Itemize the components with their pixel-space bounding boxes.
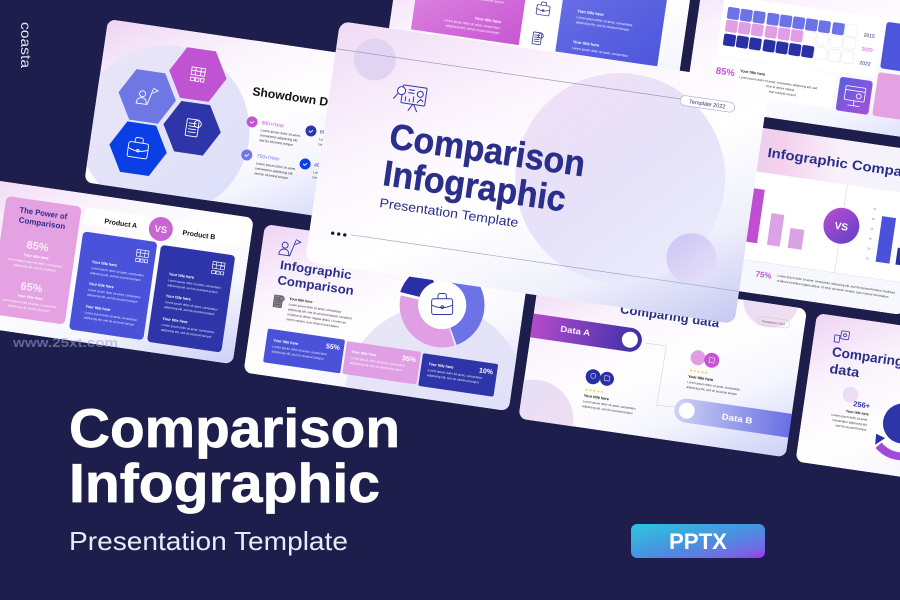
stat: 600+/Year: 600+/Year [319,129,343,139]
rating block: right: ★★★★★ [689,368,709,375]
top rule [336,49,680,99]
panel: Product B list: Your title here [162,317,188,324]
panel: blue: Lorem ipsum dolor sit amet, consectetur [572,46,629,58]
slide: Showdown Data [85,20,336,216]
stat: 900+/Year [246,116,300,146]
header: Product A versus Product B: Product B [182,230,216,241]
panel: squares card: 2022 [859,60,871,68]
panel: pink stats: 65% [20,280,43,296]
card: 55%: Your title here [273,338,299,346]
card: 35% [342,341,421,385]
panel: Product B list: adipiscing elit, sed do eiusmod tempor [164,305,215,316]
card: 10% [418,353,498,397]
panel: blue: Your title here [573,39,600,48]
stat: 256+: Lorem ipsum dolor sit amet, [831,413,869,422]
decorative circle [345,312,516,410]
heading [829,344,900,386]
heading: data [829,361,861,380]
panel: Product B list: adipiscing elit, sed do eiusmod tempor [167,283,218,294]
slide: The Power of Comparison [0,176,254,364]
panel: 85% card: aliquam erat volutpat nostrud [757,88,797,97]
header: Product A versus Product B [84,208,215,240]
hexagon: magenta [169,47,227,102]
panel: Product B list: Your title here [165,294,191,302]
slide: Comparing data right [795,313,900,500]
panel: Product B list: Lorem ipsum dolor sit amet, consectetur [165,300,218,312]
rating block: left: ★★★★★ [584,387,604,394]
divider [835,185,847,273]
panel: Product A list: Your title here [88,282,114,289]
pill: Data B [673,397,810,440]
tag: Template 2022 [679,95,735,113]
cycle graphic [873,400,900,459]
panel: white centre with icons [518,0,550,46]
header: Product A versus Product B: Product A [104,218,137,230]
text block: Lorem ipsum dolor sit amet, consectetur [288,302,342,314]
card: 55%: adipiscing elit, sed do eiusmod tempor [271,349,324,361]
panel: pink stats: Your title here [17,294,43,301]
rating block: left: adipiscing elit, sed do eiusmod tempor [582,404,633,415]
card: 10%: 10% [479,367,494,377]
panel: pink: adipiscing elit, sed do eiusmod tempor [445,23,501,35]
badge: PPTX: PPTX [669,529,727,554]
stat: 600+/Year: consectetur adipiscing elit, [318,142,357,152]
panel: pink stats: Lorem ipsum dolor sit amet, consectetur [8,257,63,269]
panel: 85% card: Lorem ipsum dolor sit amet, consectetur adipiscing elit, sed [739,75,818,90]
bar chart: left [742,188,809,250]
stat: 900+/Year: 900+/Year [261,120,285,130]
panel: Product A list [69,231,157,340]
title: Infographic [381,152,569,219]
panel: pink stats: 85% [26,239,49,254]
heading: Comparing data [619,302,721,331]
stat: 400+/Year: 400+/Year [314,162,337,172]
slide: Comparing data A and B [519,295,806,456]
panel: 85% card: tincidunt ut labore et dolore magna [748,81,795,92]
stat: 750+/Year [241,150,296,180]
pagination dots [331,231,347,237]
card: 35%: 35% [401,355,417,364]
panel: pink stats: Comparison [18,215,66,231]
stat: 256+: 256+ [853,399,871,411]
panel: Product B list [147,245,235,353]
card: 10%: adipiscing elit, sed do eiusmod tempor [427,373,479,385]
headline: Infographic [69,452,380,514]
panel: 85% card: Your title here [740,69,765,77]
card: 55% [263,329,345,373]
stat: 750+/Year: 750+/Year [256,153,280,163]
panel: Product B list: Your title here [169,272,194,280]
panel: 85% card: 85% [715,66,736,79]
stat: 400+/Year: Lorem ipsum dolor sit amet, [313,170,354,180]
card: 55%: Lorem ipsum dolor sit amet, consectetur [272,344,327,356]
pill: Data B: Data B [721,411,753,426]
header band [634,110,900,197]
bar chart: right: 50 [870,227,874,231]
rating block: right: adipiscing elit, sed do eiusmod tempor [686,385,737,396]
badge: PPTX [631,524,765,558]
text block: adipiscing elit, sed do eiusmod tempor incididunt [288,307,352,321]
slide: Infographic Comparison with donut [244,225,526,410]
stat: 400+/Year [300,158,320,179]
bar chart: right: 30 [867,246,871,251]
panel: pink: Your title here [474,15,502,24]
card: 10%: Lorem ipsum dolor sit amet, consectetur [427,368,482,380]
decorative blob: bottom left [519,380,574,426]
main slide: Comparison Infographic [305,21,769,324]
stat: 600+/Year [305,126,324,146]
panel: blue [555,0,670,66]
stat: 256+: Your title here [846,409,869,417]
stat: 600+/Year: Lorem ipsum dolor sit amet, [319,137,359,147]
text block: ut labore et dolore magna aliqua. Ut enim ad [287,312,346,325]
slide: Infographic Comparison bar charts [616,110,900,317]
panel: Product A list: Lorem ipsum dolor sit amet, consectetur [88,288,141,299]
footer strip: ut labore et dolore magna aliqua. Ut enim ad minim veniam, quis nostrud exercitation [777,279,889,299]
badge: VS [148,217,173,241]
bar chart: right [866,207,900,267]
panel: pink stats [0,196,82,325]
badge: VS [821,205,862,246]
text block: Your title here [289,297,313,304]
heading: Infographic [279,258,353,282]
donut chart [400,276,484,348]
stat: 750+/Year: sed do eiusmod tempor [254,171,290,180]
rating block: right: Your title here [688,375,713,382]
decorative big circle [501,59,739,297]
decorative circle [86,46,250,201]
stat: 256+: sed do eiusmod tempor [835,423,867,432]
panel: Product A list: Lorem ipsum dolor sit amet, consectetur [91,266,144,278]
panel: 85% card [716,67,818,96]
badge: VS: VS [154,224,168,236]
panel: Product B list: adipiscing elit, sed do eiusmod tempor [161,328,212,339]
panel: pink [411,0,531,45]
decorative circle: top left [351,36,399,83]
panel: pink stats: adipiscing elit, sed do eiusmod [7,303,50,313]
panel: Product A list: adipiscing elit, sed do eiusmod tempor [84,315,135,327]
footer strip: Lorem ipsum dolor sit amet, consectetur adipiscing elit, sed do eiusmod tempor incididunt [777,274,895,295]
icon: flag person [279,237,301,257]
title [381,115,588,221]
icon tile: monitor [836,77,873,115]
panel: Product B list: Lorem ipsum dolor sit amet, consectetur [168,278,221,290]
panel: pink stats: The Power of [19,206,68,221]
decorative blob [841,386,860,404]
heading: Showdown Data [252,84,347,112]
hexagon: blue [109,121,167,176]
card: 35%: Your title here [351,350,377,357]
stat: 750+/Year: consectetur adipiscing elit, [255,166,294,176]
panel: Product A list: Your title here [85,304,111,312]
bar chart: right: 20 [866,256,870,261]
slide: yearly grid (top right) [685,0,900,149]
hexagon: periwinkle [118,69,176,124]
heading [278,260,353,295]
stat: 900+/Year: Lorem ipsum dolor sit amet, [260,128,301,138]
panel: Product A list: Your title here [92,260,117,268]
footer strip: 75% [755,269,772,281]
heading: Comparison [277,273,355,298]
subheading: Presentation Template [69,526,348,556]
panel: Product A list: adipiscing elit, sed do eiusmod tempor [90,271,141,282]
footer strip [616,242,900,315]
card: 35%: Lorem ipsum dolor sit amet, consectetur [350,356,405,368]
rating block: right [686,349,745,397]
rating block: left: Your title here [584,394,609,401]
slide: pink and blue panels (top centre) [389,0,690,71]
panel: pink: Lorem ipsum dolor sit amet, consectetur [444,18,501,30]
icon: documents [834,330,850,344]
badge: VS: VS [834,221,849,234]
bar chart: right: 40 [869,236,873,241]
pill: Data A: Data A [560,324,591,338]
panel: pink stats: adipiscing elit, sed do eiusmod [13,263,56,273]
panel: blue: Lorem ipsum dolor sit amet, consectetur [576,15,634,27]
panel: squares card: 2015 [863,33,875,40]
watermark: www.25xt.com [12,335,118,350]
panel: blue tile [880,22,900,72]
card: 35%: adipiscing elit, sed do eiusmod tempor [350,361,402,372]
stat: 900+/Year: consectetur adipiscing elit, [260,133,298,143]
title: Comparison [387,115,588,184]
stat: 256+: consectetur adipiscing elit, [832,418,868,427]
pill: Data A [516,312,643,353]
panel: blue: adipiscing elit, sed do eiusmod tempor [575,20,631,32]
tag: Template 2022: Template 2022 [689,99,726,111]
panel: Product A list: Lorem ipsum dolor sit amet, consectetur [84,310,138,322]
card: 10%: Your title here [428,362,454,370]
stat: 750+/Year: Lorem ipsum dolor sit amet, [255,161,296,171]
stat: 400+/Year: consectetur adipiscing elit, [312,175,351,185]
bar chart: right: 60 [871,217,875,221]
panel: squares card: 2020 [861,46,873,54]
panel: Product A list: adipiscing elit, sed do eiusmod tempor [87,293,138,304]
bar chart: right: 70 [873,207,877,211]
decorative circle: bottom right [663,230,720,287]
text block: minim veniam, quis nostrud exercitation. [286,317,340,329]
bottom rule [351,235,739,291]
icon: presentation board [392,84,427,113]
card: 55%: 55% [325,343,341,352]
rating block: left: Lorem ipsum dolor sit amet, consectetur [583,399,636,411]
text block [271,295,354,330]
tag: Comparison 2022 [761,319,786,326]
panel: Product B list: Lorem ipsum dolor sit amet, consectetur [161,323,215,334]
tag [756,316,790,329]
panel: pink stats: Your title here [23,253,49,261]
rating block: right: Lorem ipsum dolor sit amet, consectetur [687,380,740,392]
decorative blob: top right [743,300,798,328]
headline [69,397,400,514]
subtitle: Presentation Template [379,195,519,230]
rating block: left [581,368,641,416]
panel: pink stats: Lorem ipsum dolor sit amet, consectetur [2,297,57,309]
headline: Comparison [69,397,400,459]
panel: squares card [718,0,875,66]
panel: pink tile [872,72,900,124]
stat: 256+ [830,396,871,432]
connector [637,343,685,408]
hexagon: navy [163,101,221,156]
stat: 900+/Year: sed do eiusmod tempor [259,138,294,147]
logo: coasta: coasta [18,22,34,68]
panel: blue: Your title here [577,8,605,17]
